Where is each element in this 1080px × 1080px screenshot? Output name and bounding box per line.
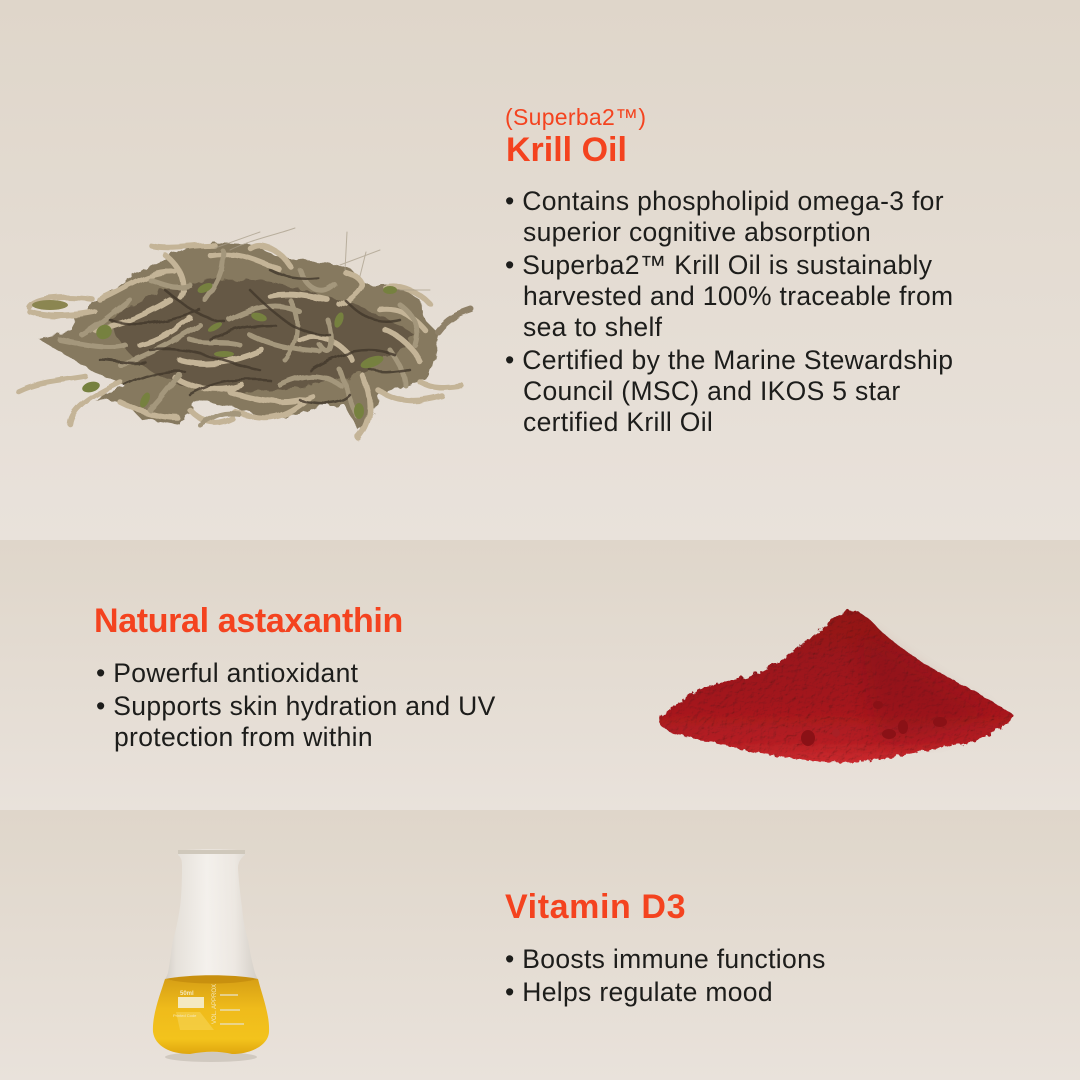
bullet list: krill oil benefits: Council (MSC) and IKOS 5 star <box>523 376 900 406</box>
bullet list: krill oil benefits: • Contains phospholipid omega-3 for <box>505 186 944 216</box>
heading: Natural astaxanthin: Natural astaxanthin <box>94 602 403 640</box>
icon: glass flask with yellow oil: 50ml <box>180 991 194 997</box>
bullet list: astaxanthin benefits: • Powerful antioxidant <box>96 658 358 688</box>
bullet list: vitamin D3 benefits: • Boosts immune functions <box>505 944 826 974</box>
text block: natural astaxanthin <box>94 602 496 752</box>
panel: astaxanthin background <box>0 540 1080 810</box>
bullet list: astaxanthin benefits: protection from within <box>114 722 373 752</box>
panel: krill oil background <box>0 0 1080 540</box>
bullet list: krill oil benefits: superior cognitive absorption <box>523 217 871 247</box>
text block: krill oil <box>505 104 953 437</box>
icon: glass flask with yellow oil: Printed Code <box>173 1013 197 1018</box>
bullet list: krill oil benefits: • Certified by the Marine Stewardship <box>505 345 953 375</box>
bullet list: vitamin D3 benefits: • Helps regulate mood <box>505 977 773 1007</box>
icon: red astaxanthin powder pile <box>659 608 1014 764</box>
bullet list: krill oil benefits: • Superba2™ Krill Oil is sustainably <box>505 250 932 280</box>
subheading: Superba2: (Superba2™) <box>505 104 646 130</box>
bullet list: krill oil benefits <box>505 186 953 437</box>
bullet list: astaxanthin benefits <box>96 658 496 752</box>
heading: Krill Oil: Krill Oil <box>506 131 627 169</box>
bullet list: astaxanthin benefits: • Supports skin hydration and UV <box>96 691 496 721</box>
text block: vitamin D3 <box>505 888 826 1007</box>
icon: krill pile <box>16 228 474 442</box>
panel: vitamin D3 background <box>0 810 1080 1080</box>
bullet list: krill oil benefits: harvested and 100% traceable from <box>523 281 953 311</box>
bullet list: krill oil benefits: sea to shelf <box>523 312 662 342</box>
icon: glass flask with yellow oil: VOL. APPROX <box>212 984 218 1024</box>
bullet list: krill oil benefits: certified Krill Oil <box>523 407 713 437</box>
heading: Vitamin D3: Vitamin D3 <box>505 888 686 926</box>
bullet list: vitamin D3 benefits <box>505 944 826 1007</box>
